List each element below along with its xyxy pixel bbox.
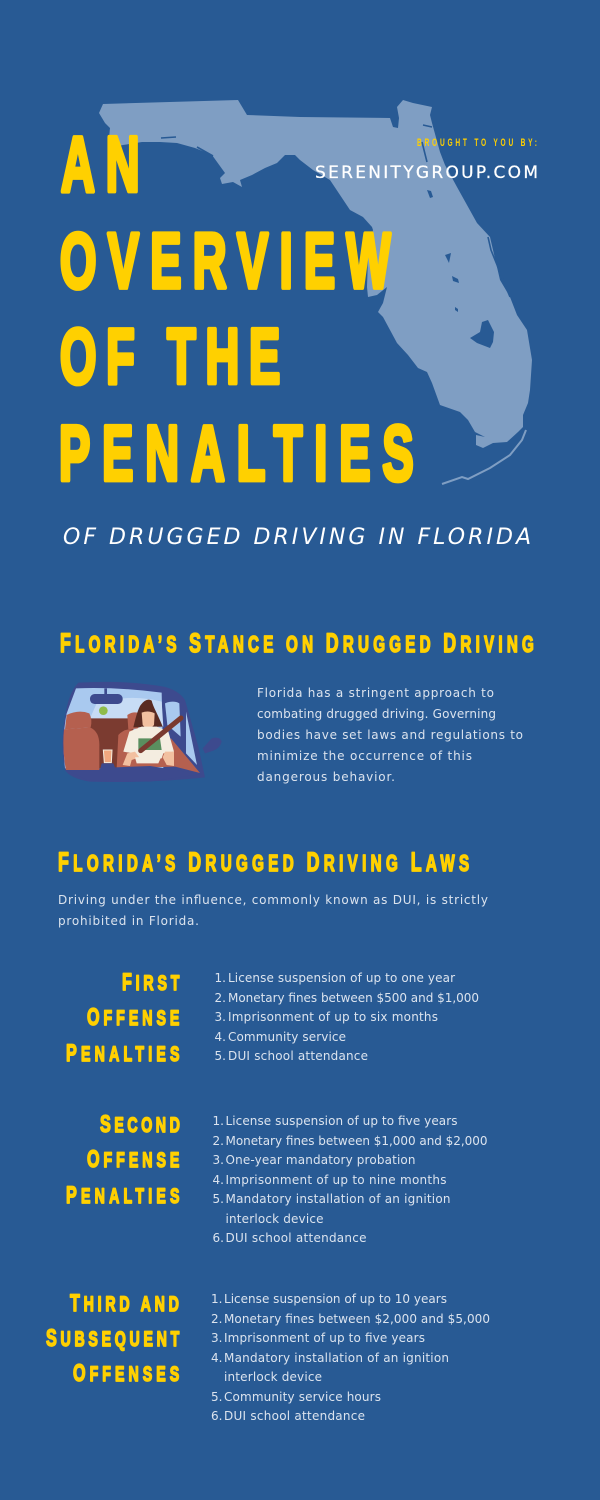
list: first offense: Monetary fines between $500 and $1,000 xyxy=(228,991,479,1005)
heading: laws: FLORIDA’S DRUGGED DRIVING LAWS xyxy=(58,846,469,877)
brown door panel xyxy=(171,738,200,773)
title: OVERVIEW xyxy=(60,217,391,304)
paragraph: stance: minimize the occurrence of this xyxy=(257,749,472,763)
list: third offense: Community service hours xyxy=(224,1390,381,1404)
heading: third offense: SUBSEQUENT xyxy=(46,1325,179,1352)
heading: second offense: SECOND xyxy=(100,1111,180,1138)
list: second offense: License suspension of up to five years xyxy=(226,1114,458,1128)
title: OF THE xyxy=(60,313,280,400)
title: PENALTIES xyxy=(59,410,414,497)
heading: first offense: FIRST xyxy=(122,969,179,996)
right seat xyxy=(117,729,175,768)
windshield xyxy=(64,688,163,768)
list: third offense: interlock device xyxy=(224,1370,322,1384)
heading: stance: FLORIDA’S STANCE ON DRUGGED DRIVING xyxy=(60,627,534,658)
list: second offense: 5. xyxy=(213,1192,224,1206)
paragraph: stance: combating drugged driving. Governing xyxy=(257,707,496,721)
illustration: woman driving xyxy=(62,682,222,782)
list: third offense: 2. xyxy=(211,1312,222,1326)
list: third offense: 3. xyxy=(211,1331,222,1345)
list: second offense: Imprisonment of up to nine months xyxy=(226,1173,446,1187)
list: first offense: Imprisonment of up to six months xyxy=(228,1010,438,1024)
list: first offense: 4. xyxy=(215,1030,226,1044)
list: second offense: 3. xyxy=(213,1153,224,1167)
list: first offense xyxy=(215,971,479,1063)
left headrest xyxy=(65,712,91,729)
paragraph: laws: prohibited in Florida. xyxy=(58,914,199,928)
list: first offense: License suspension of up to one year xyxy=(228,971,455,985)
paragraph: laws: Driving under the influence, commonly known as DUI, is strictly xyxy=(58,893,488,907)
side windows xyxy=(165,702,181,737)
heading: first offense: PENALTIES xyxy=(66,1040,180,1067)
brought to you by: BROUGHT TO YOU BY: xyxy=(417,136,537,148)
list: third offense: 5. xyxy=(211,1390,222,1404)
heading: second offense xyxy=(66,1111,180,1209)
dashboard xyxy=(67,763,202,782)
list: first offense: Community service xyxy=(228,1030,346,1044)
list: second offense: Monetary fines between $1,000 and $2,000 xyxy=(226,1134,488,1148)
list: third offense: Mandatory installation of an ignition xyxy=(224,1351,449,1365)
paragraph: stance: Florida has a stringent approach to xyxy=(257,686,494,700)
list: second offense: interlock device xyxy=(226,1212,324,1226)
list: third offense: DUI school attendance xyxy=(224,1409,365,1423)
list: third offense: Imprisonment of up to five years xyxy=(224,1331,425,1345)
website: SERENITYGROUP.COM xyxy=(315,163,538,183)
heading: third offense xyxy=(46,1290,179,1387)
list: first offense: 5. xyxy=(215,1049,226,1063)
paragraph: laws xyxy=(58,893,488,928)
title: AN xyxy=(61,121,140,208)
list: first offense: DUI school attendance xyxy=(228,1049,368,1063)
title xyxy=(59,121,414,497)
list: third offense xyxy=(211,1292,490,1423)
list: second offense: 2. xyxy=(213,1134,224,1148)
left seat xyxy=(63,727,99,770)
woman xyxy=(123,700,181,766)
heading: second offense: OFFENSE xyxy=(87,1146,179,1173)
heading: second offense: PENALTIES xyxy=(66,1182,180,1209)
paragraph: stance xyxy=(257,686,523,784)
list: third offense: 4. xyxy=(211,1351,222,1365)
list: third offense: 6. xyxy=(211,1409,222,1423)
heading: first offense: OFFENSE xyxy=(87,1004,179,1031)
paragraph: stance: bodies have set laws and regulations to xyxy=(257,728,523,742)
list: second offense: DUI school attendance xyxy=(226,1231,366,1245)
air freshener xyxy=(99,706,108,715)
list: second offense: One-year mandatory probation xyxy=(226,1153,416,1167)
list: third offense: Monetary fines between $2,000 and $5,000 xyxy=(224,1312,490,1326)
list: second offense: 6. xyxy=(213,1231,224,1245)
list: first offense: 3. xyxy=(215,1010,226,1024)
subtitle: OF DRUGGED DRIVING IN FLORIDA xyxy=(63,525,531,550)
back interior xyxy=(88,718,133,768)
list: second offense xyxy=(213,1114,488,1245)
car frame xyxy=(62,682,205,782)
florida map xyxy=(99,100,532,484)
list: second offense: 1. xyxy=(213,1114,224,1128)
right headrest xyxy=(127,712,140,729)
side mirror xyxy=(203,738,222,753)
list: second offense: 4. xyxy=(213,1173,224,1187)
list: second offense: Mandatory installation of an ignition xyxy=(226,1192,450,1206)
list: first offense: 1. xyxy=(215,971,226,985)
list: third offense: 1. xyxy=(211,1292,222,1306)
coffee cup xyxy=(103,750,112,763)
paragraph: stance: dangerous behavior. xyxy=(257,770,395,784)
heading: third offense: OFFENSES xyxy=(73,1360,179,1387)
list: first offense: 2. xyxy=(215,991,226,1005)
heading: third offense: THIRD AND xyxy=(70,1290,179,1317)
list: third offense: License suspension of up to 10 years xyxy=(224,1292,447,1306)
heading: first offense xyxy=(66,969,180,1067)
rear-view mirror xyxy=(90,694,123,704)
